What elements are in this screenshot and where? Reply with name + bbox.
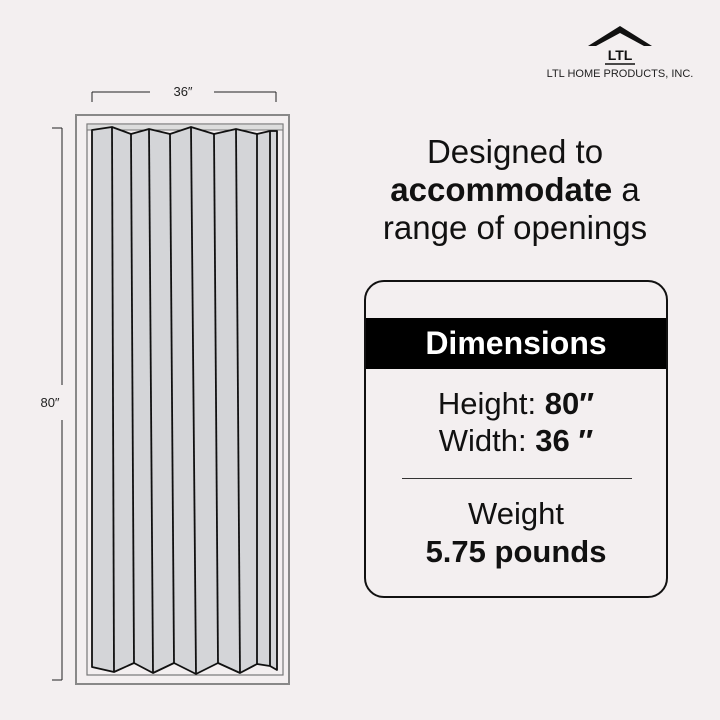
header band xyxy=(366,318,666,369)
illustration: folding door with dimensions xyxy=(40,84,290,685)
logo: LTL xyxy=(608,47,633,63)
headline: accommodate a xyxy=(390,171,640,208)
headline: range of openings xyxy=(383,209,647,246)
dimension: width 36: 36″ xyxy=(173,84,193,99)
height and width text: Width: 36 ″ xyxy=(439,423,593,458)
headline: Designed to xyxy=(427,133,603,170)
door panels xyxy=(92,127,277,674)
panel: dimensions box xyxy=(364,280,668,598)
weight text: 5.75 pounds xyxy=(426,534,606,569)
height and width text: Height: 80″ xyxy=(438,386,594,421)
height and width text xyxy=(438,386,594,458)
header band: Dimensions xyxy=(425,325,607,361)
door frame xyxy=(76,115,289,684)
divider xyxy=(402,478,632,479)
logo: LTL HOME PRODUCTS, INC. xyxy=(547,68,693,80)
headline xyxy=(383,133,647,246)
dimension: height 80: 80″ xyxy=(40,395,60,410)
weight text: Weight xyxy=(468,496,564,531)
logo xyxy=(547,26,693,80)
weight text xyxy=(426,496,606,569)
